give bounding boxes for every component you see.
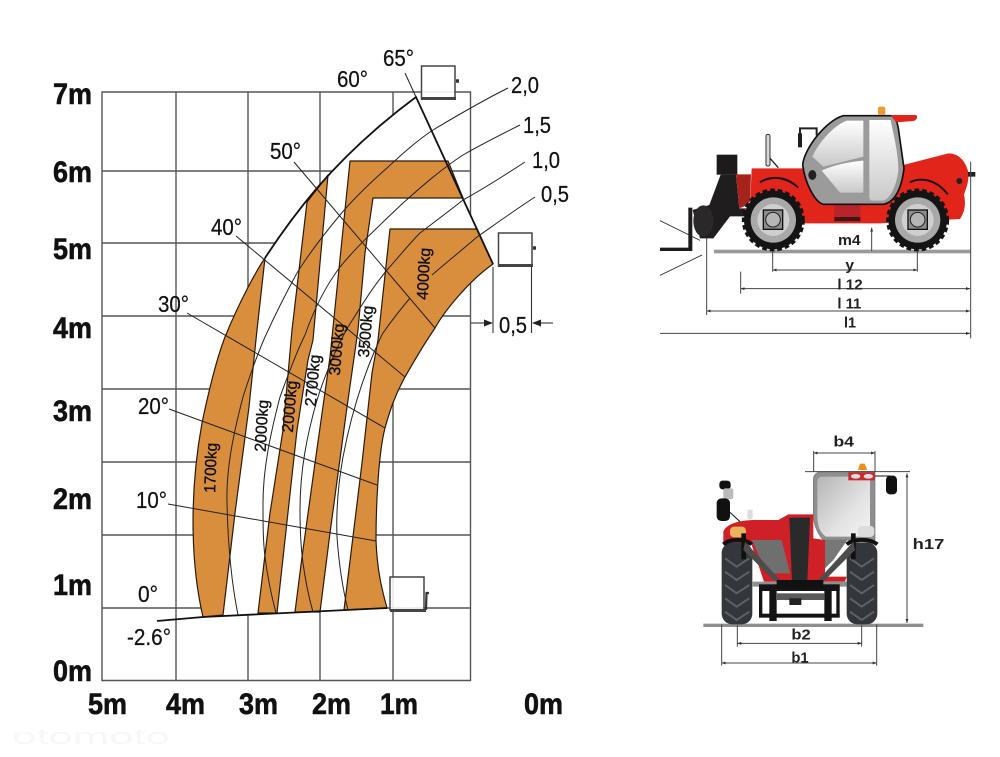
beacon and rear lights bbox=[848, 464, 897, 494]
weight labels bbox=[202, 247, 434, 493]
weight labels: 2000kg bbox=[280, 380, 301, 433]
load box: top bbox=[421, 66, 459, 99]
load curve 2,0 bbox=[227, 88, 508, 615]
left mirrors bbox=[717, 481, 753, 522]
dimension lines: h17 bbox=[913, 536, 944, 553]
mudguards and lights bbox=[723, 526, 877, 559]
angle labels: 65° bbox=[383, 45, 414, 71]
angle lines bbox=[168, 73, 435, 541]
front view telehandler bbox=[703, 434, 944, 667]
dimension lines: b2 bbox=[791, 626, 811, 643]
reach axis labels: 1m bbox=[380, 688, 418, 721]
chassis bbox=[743, 153, 968, 223]
front wheel bbox=[743, 190, 803, 250]
fork carriage bbox=[743, 542, 855, 621]
load curve 0,5 bbox=[337, 197, 535, 610]
dimension lines: l1 bbox=[844, 314, 856, 331]
weight labels: 3500kg bbox=[356, 305, 377, 358]
mirrors bbox=[766, 128, 817, 168]
boom bbox=[789, 518, 810, 582]
height axis labels: 4m bbox=[53, 312, 92, 345]
weight labels: 4000kg bbox=[415, 247, 434, 300]
angle labels: 10° bbox=[136, 487, 167, 513]
capacity band: 3000kg bbox=[295, 161, 463, 612]
angle labels: 30° bbox=[158, 291, 189, 317]
reach axis labels: 0m bbox=[524, 688, 563, 721]
dimension lines: l 12 bbox=[837, 276, 863, 293]
outer reach envelope bbox=[193, 97, 493, 617]
weight labels: 3000kg bbox=[327, 323, 348, 376]
dimension lines: b1 bbox=[791, 650, 809, 667]
load curve 1,5 bbox=[263, 125, 520, 613]
boom and fork bbox=[660, 155, 750, 275]
cab bbox=[803, 107, 917, 204]
capacity band: 2000kg bbox=[258, 175, 328, 613]
height axis labels bbox=[53, 78, 92, 688]
dimension 0,5 bbox=[471, 267, 553, 338]
tyres bbox=[722, 542, 877, 624]
cab bbox=[813, 472, 875, 540]
dimension 0,5: 0,5 bbox=[499, 312, 527, 338]
reach axis labels: 4m bbox=[166, 688, 205, 721]
angle labels: 60° bbox=[337, 66, 368, 92]
dimension lines: l 11 bbox=[837, 295, 861, 312]
dimension lines bbox=[660, 162, 971, 338]
load chart bbox=[53, 45, 569, 721]
load curve 1,0 bbox=[300, 162, 525, 612]
load box: bottom bbox=[390, 577, 429, 610]
ground bbox=[703, 624, 923, 627]
envelope outline bbox=[157, 97, 493, 621]
angle labels bbox=[127, 45, 414, 650]
height axis labels: 2m bbox=[53, 483, 92, 516]
capacity band: 4000kg bbox=[344, 229, 493, 610]
weight labels: 2700kg bbox=[303, 354, 324, 407]
angle labels: 50° bbox=[270, 138, 301, 164]
height axis labels: 7m bbox=[53, 78, 92, 111]
weight labels: 1700kg bbox=[202, 443, 221, 493]
reach axis labels: 2m bbox=[312, 688, 351, 721]
capacity band: 1700kg bbox=[193, 258, 265, 617]
ground bbox=[714, 250, 971, 253]
angle labels: 0° bbox=[138, 581, 158, 607]
load curve labels: 2,0 bbox=[511, 72, 539, 98]
angle labels: 40° bbox=[211, 214, 242, 240]
load curve labels: 1,0 bbox=[532, 147, 560, 173]
body bbox=[723, 514, 825, 582]
rear wheel bbox=[888, 190, 948, 250]
dimension lines: y bbox=[845, 257, 855, 274]
reach axis labels: 3m bbox=[239, 688, 278, 721]
dimension lines: b4 bbox=[833, 434, 855, 451]
load curve labels: 0,5 bbox=[541, 181, 569, 207]
dimension lines bbox=[722, 434, 944, 667]
height axis labels: 5m bbox=[53, 233, 92, 266]
reach axis labels: 5m bbox=[88, 688, 127, 721]
height axis labels: 0m bbox=[53, 655, 92, 688]
angle labels: -2.6° bbox=[127, 624, 171, 650]
load curve labels: 1,5 bbox=[523, 112, 551, 138]
dimension lines: m4 bbox=[838, 232, 861, 249]
height axis labels: 3m bbox=[53, 395, 92, 428]
reach axis labels bbox=[88, 688, 563, 721]
weight labels: 2000kg bbox=[253, 399, 272, 452]
load curve labels bbox=[511, 72, 569, 207]
height axis labels: 6m bbox=[53, 156, 92, 189]
height axis labels: 1m bbox=[53, 569, 92, 602]
side view telehandler bbox=[660, 107, 975, 338]
watermark: otomoto bbox=[12, 724, 170, 749]
load box: right bbox=[498, 233, 536, 266]
grid bbox=[102, 92, 470, 680]
angle labels: 20° bbox=[138, 393, 169, 419]
